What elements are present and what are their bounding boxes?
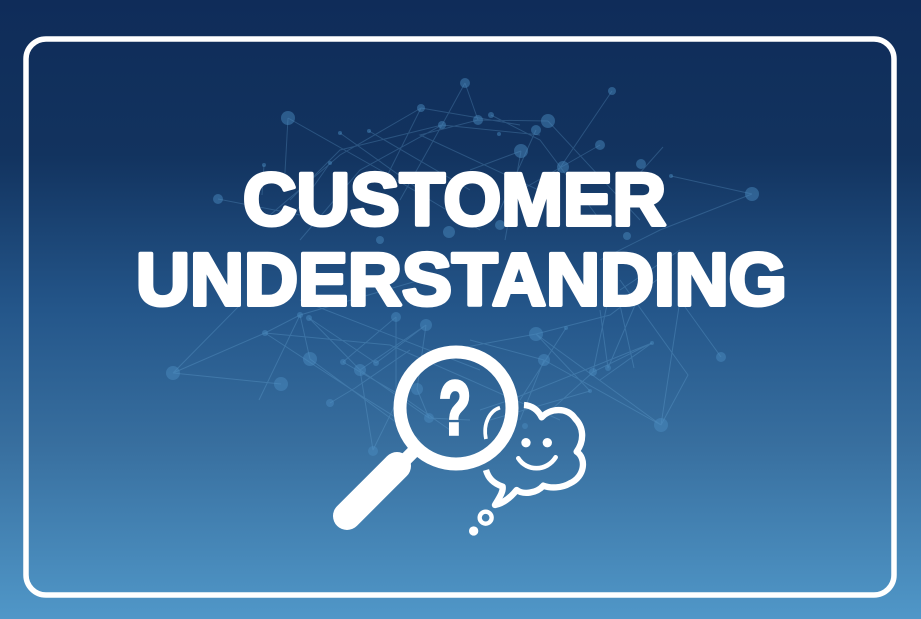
title line 1: CUSTOMER	[243, 158, 666, 241]
icon: magnifying glass with thought cloud	[347, 352, 583, 536]
icon: magnifier	[347, 352, 512, 516]
title line 2: UNDERSTANDING	[136, 238, 787, 321]
icon: smiling thought cloud	[469, 405, 583, 536]
network nodes	[166, 78, 759, 456]
title	[136, 158, 787, 321]
icon: question mark: ?	[439, 366, 471, 451]
network graph background	[166, 78, 759, 456]
